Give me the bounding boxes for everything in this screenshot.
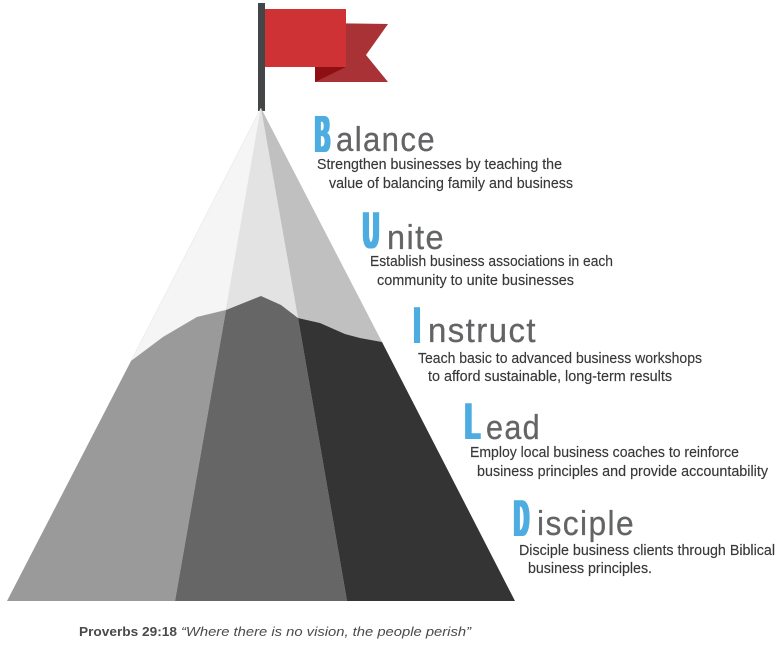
section: Unite: Establish business associations in each [370, 253, 613, 270]
section: Balance: B [315, 106, 330, 164]
section: Instruct [414, 297, 702, 385]
section: Lead: business principles and provide accountability [477, 463, 768, 480]
mountain [7, 108, 515, 601]
section: Instruct: Teach basic to advanced business workshops [418, 350, 702, 367]
section: Instruct: I [414, 297, 420, 355]
section: Balance: Strengthen businesses by teaching the [317, 156, 562, 173]
section: Lead: ead [486, 409, 541, 447]
section: Lead [465, 393, 768, 480]
section: Unite: nite [387, 219, 445, 257]
section: Disciple: business principles. [528, 560, 652, 577]
section: Unite: U [363, 202, 379, 260]
verse caption: “Where there is no vision, the people perish” [181, 624, 472, 639]
section: Instruct: nstruct [428, 312, 537, 350]
section: Disciple: D [514, 490, 529, 548]
section: Unite: community to unite businesses [377, 272, 574, 289]
section: Disciple [514, 490, 775, 577]
section: Balance: value of balancing family and business [329, 175, 573, 192]
verse caption [79, 624, 472, 639]
section: Disciple: isciple [537, 505, 635, 543]
section: Lead: Employ local business coaches to reinforce [470, 444, 739, 461]
verse caption: Proverbs 29:18 [79, 624, 177, 639]
section: Instruct: to afford sustainable, long-term results [428, 368, 672, 385]
section: Balance: alance [336, 121, 436, 159]
icon: flag [258, 3, 388, 111]
section: Unite [363, 202, 613, 289]
section: Lead: L [465, 393, 480, 451]
section: Balance [315, 106, 573, 192]
